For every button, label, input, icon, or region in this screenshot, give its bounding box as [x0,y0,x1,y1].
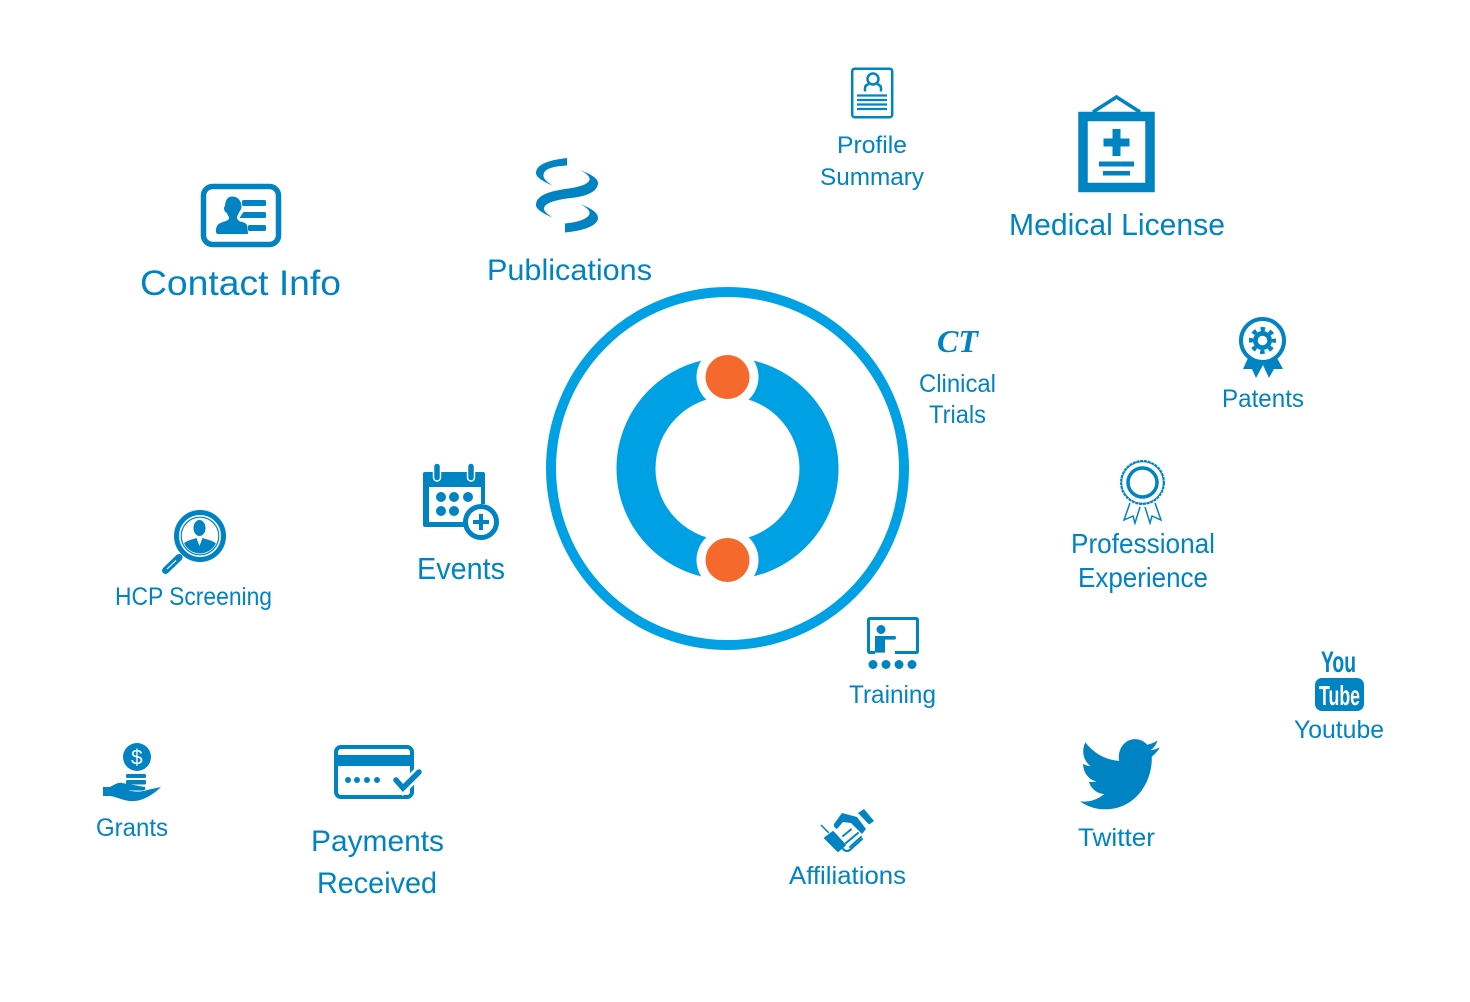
icon: Twitter bird [1080,739,1160,809]
item: Medical License [1009,97,1225,242]
icon: contact card [204,186,278,244]
icon: magnifier with person [166,512,224,570]
item: Training [849,618,936,709]
label: Affiliations [789,862,906,890]
item: Contact Info [140,186,341,303]
label: Training [849,681,936,709]
icon: credit card with check [336,747,419,797]
icon: gear rosette [1241,319,1284,378]
icon: helix [536,158,598,232]
item: Payments Received [311,747,444,900]
label: Twitter [1078,824,1155,852]
item: Publications [487,158,652,287]
icon: CT letters: CT [937,323,979,359]
item: Twitter [1078,739,1160,852]
icon: hand holding coin: $ [131,746,143,770]
item: Affiliations [789,809,906,890]
item: Profile Summary [820,69,924,191]
item: Professional Experience [1071,461,1215,593]
item: Youtube [1294,646,1384,744]
label: Publications [487,254,652,287]
infographic canvas [97,68,1383,894]
label: Youtube [1294,716,1384,744]
central logo [551,292,904,645]
item: HCP Screening [115,512,272,611]
label: Contact Info [140,264,341,303]
label: Payments [311,825,444,858]
icon: handshake with syringe [821,809,874,851]
icon: framed medical license [1083,97,1150,188]
label: Grants [96,814,168,842]
icon: YouTube logo: Tube [1319,680,1360,711]
label: Events [417,551,505,586]
icon: award ribbon [1121,461,1164,523]
icon: YouTube logo [1315,646,1364,711]
label: HCP Screening [115,583,272,611]
label: Profile [837,132,907,159]
label: Patents [1222,385,1304,413]
item: Grants [96,743,168,842]
label: Professional [1071,528,1215,559]
icon: YouTube logo: You [1321,646,1356,679]
icon: calendar with plus [423,463,496,538]
item: Clinical Trials: Trials [929,401,986,429]
item: Patents [1222,319,1304,413]
icon: profile document [852,69,892,117]
item: Events [417,463,505,586]
item: Payments Received: Received [317,867,437,900]
item: Profile Summary: Summary [820,164,924,191]
item: Clinical Trials [919,323,996,429]
label: Medical License [1009,207,1225,242]
icon: presenter at board [868,618,918,669]
label: Clinical [919,370,996,398]
item: Professional Experience: Experience [1078,562,1208,593]
